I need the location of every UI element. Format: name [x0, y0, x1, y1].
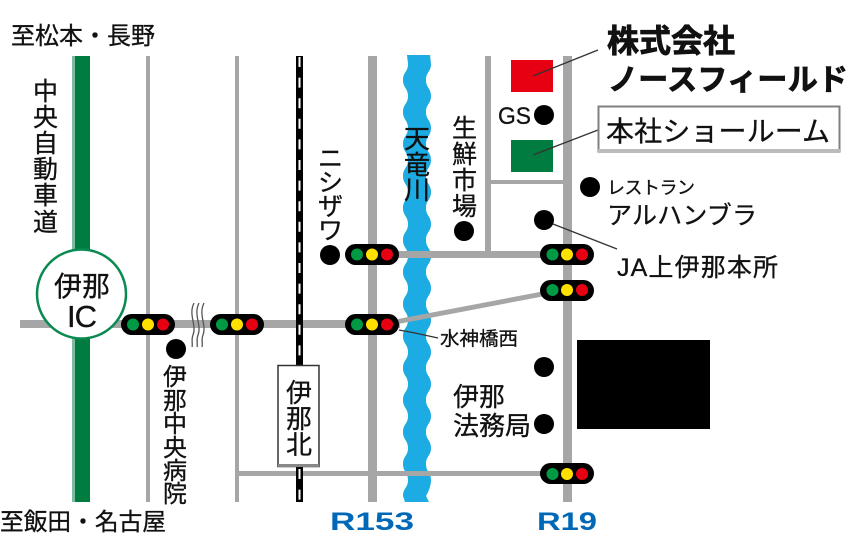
- interchange circle: Ina IC: IC: [67, 299, 97, 334]
- label: Nishizawa: ニシザワ: [318, 145, 343, 245]
- label: company name: 株式会社: [607, 23, 735, 59]
- label: restaurant Alhambra: [607, 178, 757, 230]
- leader lines: [399, 50, 617, 338]
- company building: red marker: [511, 60, 553, 92]
- label: Ina Legal Affairs Bureau: [453, 382, 531, 441]
- traffic signal: [540, 463, 594, 484]
- label: Tenryu River: 天竜川: [404, 124, 430, 205]
- label: restaurant Alhambra: アルハンブラ: [607, 202, 757, 230]
- label: Ina Legal Affairs Bureau: 伊那: [453, 382, 505, 412]
- traffic signal: [345, 314, 399, 335]
- route label: R153: R153: [330, 508, 414, 536]
- river: Tenryu: [403, 55, 431, 502]
- interchange circle: Ina IC: 伊那: [54, 271, 110, 302]
- black building block: [577, 340, 710, 429]
- label: GS: GS: [498, 103, 531, 130]
- station sign: Ina-kita: 伊那北: [286, 378, 312, 460]
- label: fresh market: 生鮮市場: [452, 115, 477, 221]
- label: company name: [607, 23, 848, 97]
- destination label: south: 至飯田・名古屋: [0, 509, 166, 536]
- route label: R19: R19: [537, 508, 597, 536]
- destination label: north: 至松本・長野: [11, 23, 155, 50]
- label: Ina Legal Affairs Bureau: 法務局: [453, 411, 531, 441]
- label: restaurant Alhambra: レストラン: [607, 178, 695, 198]
- road network: [20, 56, 572, 502]
- traffic signal: [210, 314, 264, 335]
- expressway: [72, 56, 90, 502]
- label: Ina Central Hospital: 伊那中央病院: [163, 364, 187, 508]
- traffic signal: [540, 244, 594, 265]
- railway: [296, 56, 303, 502]
- traffic signal: [121, 314, 175, 335]
- showroom building: green marker: [511, 140, 553, 172]
- label: company name: ノースフィールド: [608, 64, 848, 97]
- traffic signal: [345, 244, 399, 265]
- interchange circle: Ina IC: [37, 250, 126, 338]
- traffic signal: [540, 280, 594, 301]
- label box: head office showroom: 本社ショールーム: [606, 116, 830, 147]
- station sign: Ina-kita: [278, 366, 319, 467]
- label: JA Kami-Ina: JA上伊那本所: [617, 254, 778, 282]
- label box: head office showroom: [598, 106, 840, 153]
- label: Suijin-bashi West: 水神橋西: [440, 328, 518, 350]
- road break mark: [192, 303, 204, 347]
- landmark dots: [166, 105, 600, 434]
- label: Chuo Expressway: 中央自動車道: [33, 78, 58, 237]
